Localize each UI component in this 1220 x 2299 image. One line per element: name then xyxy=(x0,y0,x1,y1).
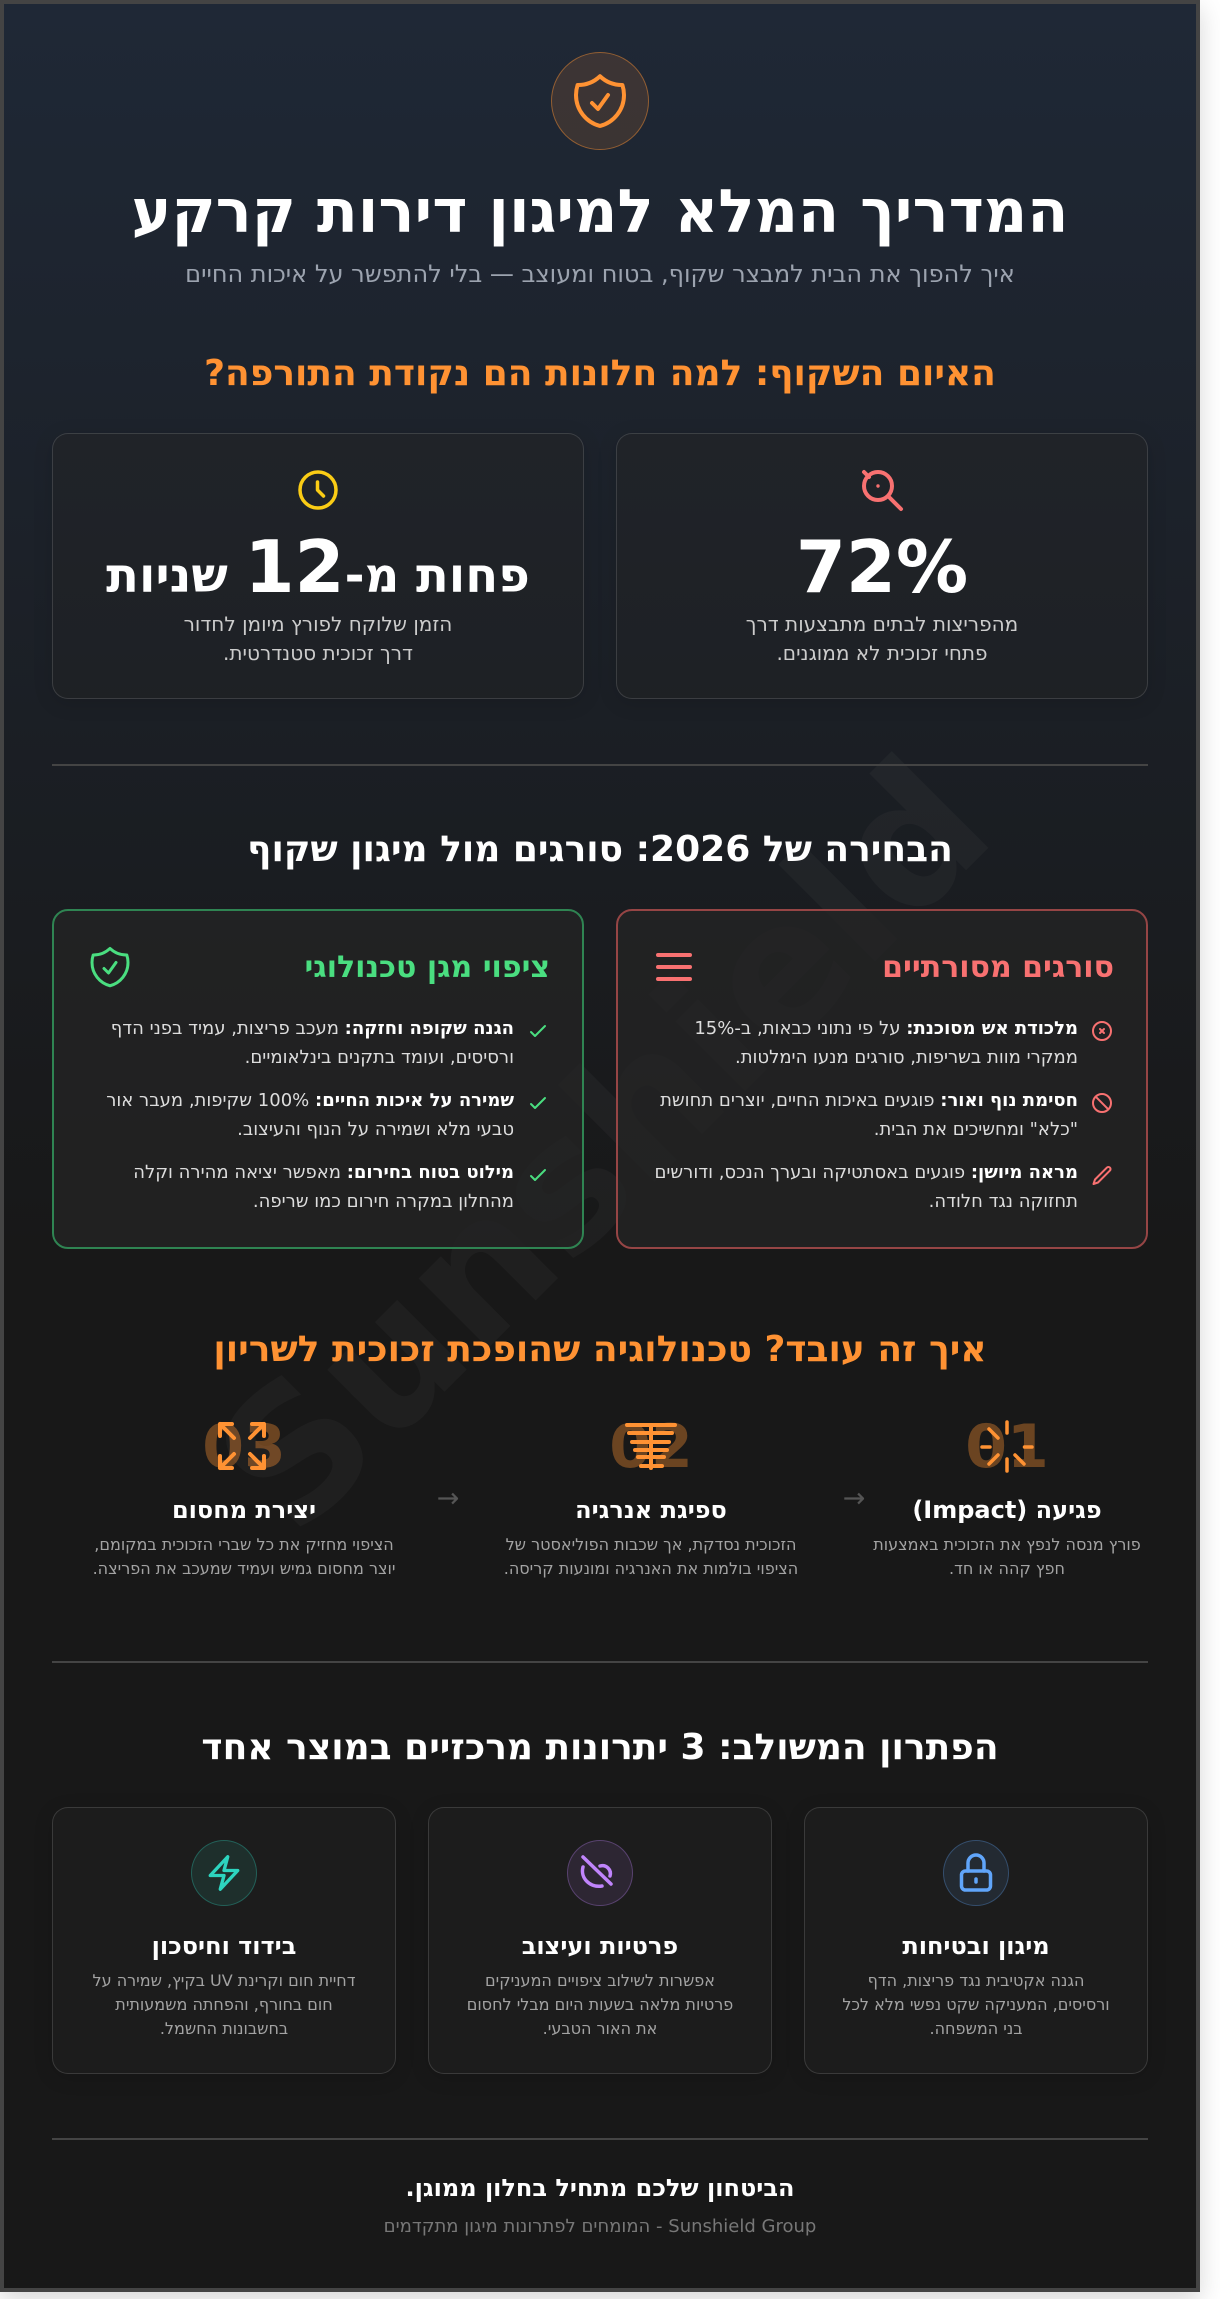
text: emergency exit: מהחלון במקרה חירום כמו שריפה. xyxy=(253,1191,514,1212)
benefit text: insulation xyxy=(92,1971,355,2038)
icon: green shield xyxy=(90,946,130,988)
divider xyxy=(52,764,1148,766)
step number 02: 02 xyxy=(609,1412,693,1482)
text: emergency exit: מילוט בטוח בחירום: מאפשר יציאה מהירה וקלה xyxy=(133,1162,514,1183)
icon: header shield xyxy=(551,52,649,150)
benefit text: privacy xyxy=(467,1971,733,2038)
benefit title: security: מיגון ובטיחות xyxy=(902,1932,1050,1960)
benefit text: privacy: את האור הטבעי. xyxy=(543,2019,657,2038)
text: view blocked: חסימת נוף ואור: פוגעים באיכות החיים, יוצרים תחושת xyxy=(660,1090,1078,1111)
step text: הציפוי מחזיק את כל שברי הזכוכית במקומם, xyxy=(94,1535,394,1554)
step text: הציפוי בולמות את האנרגיה ומונעות קריסה. xyxy=(504,1559,798,1578)
divider xyxy=(52,1661,1148,1663)
text: worn look: מראה מיושן: פוגעים באסתטיקה ובערך הנכס, ודורשים xyxy=(654,1162,1078,1183)
text: worn look: תחזוקה נגד חלודה. xyxy=(929,1191,1078,1212)
stat text 12 seconds xyxy=(184,612,452,665)
benefit text: security: הגנה אקטיבית נגד פריצות, הדף xyxy=(868,1971,1084,1990)
step title: ספיגת אנרגיה xyxy=(575,1496,727,1524)
arrow 2: → xyxy=(437,1483,459,1514)
panel: technological film xyxy=(52,909,584,1249)
divider xyxy=(52,2138,1148,2140)
stat value 72%: 72% xyxy=(796,525,968,609)
heading: solution: הפתרון המשולב: 3 יתרונות מרכזיים במוצר אחד xyxy=(201,1727,999,1768)
step 2: energy xyxy=(504,1412,798,1578)
icon: impact burst xyxy=(980,1420,1034,1473)
icon: clock xyxy=(298,470,338,510)
text: fire trap xyxy=(694,1018,1078,1068)
benefit text: insulation: בחשבונות החשמל. xyxy=(160,2019,288,2038)
text: quality of life: טבעי מלא ושמירה על הנוף והעיצוב. xyxy=(237,1119,514,1140)
stat text 72%: פתחי זכוכית לא ממוגנים. xyxy=(776,641,988,665)
icon: check 2 xyxy=(530,1097,546,1109)
step text xyxy=(873,1535,1141,1578)
text: quality of life xyxy=(106,1090,514,1140)
step text: הזכוכית נסדקת, אך שכבות הפוליאסטר של xyxy=(506,1535,796,1554)
stat text 72%: מהפריצות לבתים מתבצעות דרך xyxy=(746,612,1018,636)
step title: יצירת מחסום xyxy=(172,1496,316,1524)
heading: threat: האיום השקוף: למה חלונות הם נקודת התורפה? xyxy=(204,353,996,394)
footer headline: הביטחון שלכם מתחיל בחלון ממוגן. xyxy=(406,2174,794,2202)
icon: check 3 xyxy=(530,1169,546,1181)
icon: lock xyxy=(943,1840,1009,1906)
text: protection xyxy=(111,1018,514,1068)
heading: how it works: איך זה עובד? טכנולוגיה שהופכת זכוכית לשריון xyxy=(213,1329,987,1370)
panel: security xyxy=(804,1807,1148,2074)
panel: insulation xyxy=(52,1807,396,2074)
step 1: impact xyxy=(873,1412,1141,1578)
heading: choice: הבחירה של 2026: סורגים מול מיגון שקוף xyxy=(247,829,953,870)
step text: חפץ קהה או חד. xyxy=(949,1559,1065,1578)
benefit text: insulation: דחיית חום וקרינת UV בקיץ, שמירה על xyxy=(92,1971,355,1990)
icon: eye slash xyxy=(567,1840,633,1906)
footer text: Sunshield Group - המומחים לפתרונות מיגון מתקדמים xyxy=(384,2216,816,2237)
icon: bolt xyxy=(191,1840,257,1906)
benefit text: security: ורסיסים, המעניקה שקט נפשי מלא לכל xyxy=(842,1995,1110,2014)
icon: energy layers xyxy=(625,1423,677,1470)
icon: check 1 xyxy=(530,1025,546,1037)
step title: פגיעה (Impact) xyxy=(912,1496,1102,1524)
step number 01: 01 xyxy=(965,1412,1049,1482)
step 3: barrier xyxy=(93,1412,395,1578)
panel: privacy xyxy=(428,1807,772,2074)
panel: stat 12 seconds xyxy=(52,433,584,699)
icon: search xyxy=(862,470,904,512)
icon: menu bars xyxy=(656,953,692,981)
stat text 72% xyxy=(746,612,1018,665)
heading: technological film: ציפוי מגן טכנולוגי xyxy=(304,950,550,985)
benefit text: privacy: אפשרות לשילוב ציפויים המעניקים xyxy=(485,1971,715,1990)
panel: stat 72% xyxy=(616,433,1148,699)
subtitle: איך להפוך את הבית למבצר שקוף, בטוח ומעוצב — בלי להתפשר על איכות החיים xyxy=(185,260,1015,288)
panel: traditional bars xyxy=(616,909,1148,1249)
icon: blocked xyxy=(1092,1093,1112,1113)
text: view blocked xyxy=(660,1090,1078,1140)
text: fire trap: ממקרי מוות בשריפות, סורגים מנעו הימלטות. xyxy=(735,1047,1078,1068)
watermark: Sunshield xyxy=(178,720,1030,1572)
benefit text: security xyxy=(842,1971,1110,2038)
text: protection: ורסיסים, ועומד בתקנים בינלאומיים. xyxy=(245,1047,514,1068)
icon: x circle xyxy=(1092,1021,1112,1041)
icon: pencil xyxy=(1092,1166,1112,1185)
step text xyxy=(93,1535,395,1578)
stat text 12 seconds: הזמן שלוקח לפורץ מיומן לחדור xyxy=(184,612,452,636)
benefit text: privacy: פרטיות מלאה בשעות היום מבלי לחסום xyxy=(467,1995,733,2014)
text: protection: הגנה שקופה וחזקה: מעכב פריצות, עמיד בפני הדף xyxy=(111,1018,514,1039)
text: emergency exit xyxy=(133,1162,514,1212)
stat text 12 seconds: דרך זכוכית סטנדרטית. xyxy=(223,641,413,665)
arrow 1: → xyxy=(843,1483,865,1514)
step text xyxy=(504,1535,798,1578)
step text: יוצר מחסום גמיש ועמיד שמעכב את הפריצה. xyxy=(93,1559,395,1578)
title: המדריך המלא למיגון דירות קרקע xyxy=(131,177,1068,247)
step number 03: 03 xyxy=(202,1412,286,1482)
heading: traditional bars: סורגים מסורתיים xyxy=(882,950,1114,985)
step text: פורץ מנסה לנפץ את הזכוכית באמצעות xyxy=(873,1535,1141,1554)
stat value 12 seconds: פחות מ-12 שניות xyxy=(106,525,530,609)
benefit text: insulation: חום בחורף, והפחתה משמעותית xyxy=(115,1995,333,2014)
benefit text: security: בני המשפחה. xyxy=(930,2019,1022,2038)
benefit title: insulation: בידוד וחיסכון xyxy=(152,1932,296,1960)
text: quality of life: שמירה על איכות החיים: 100% שקיפות, מעבר אור xyxy=(106,1090,514,1111)
text: worn look xyxy=(654,1162,1078,1212)
benefit title: privacy: פרטיות ועיצוב xyxy=(522,1932,678,1960)
text: fire trap: מלכודת אש מסוכנת: על פי נתוני כבאות, ב-15% xyxy=(694,1018,1078,1039)
icon: expand arrows xyxy=(218,1422,266,1470)
text: view blocked: "כלא" ומחשיכים את הבית. xyxy=(874,1119,1078,1140)
